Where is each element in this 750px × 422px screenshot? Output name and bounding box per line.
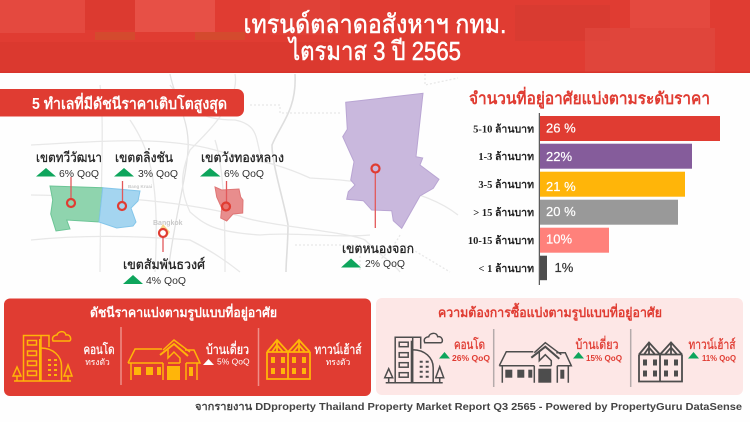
- district: Thawi Watthana: เขตทวีวัฒนา: [36, 150, 102, 165]
- district: Nong Chok: เขตหนองจอก: [342, 241, 414, 256]
- panel: price index by property type: ทาวน์เฮ้าส์: [314, 342, 362, 357]
- bar chart: housing by price range: 1-3 ล้านบาท: [478, 150, 534, 163]
- bar chart: housing by price range: [468, 86, 720, 285]
- panel: price index by property type: 5% QoQ: [217, 356, 250, 366]
- district: Thawi Watthana: [36, 150, 103, 231]
- panel: demand by property type: ความต้องการซื้อแบ่งตามรูปแบบที่อยู่อาศัย: [438, 302, 662, 321]
- heading pill: top growth locations: [0, 89, 244, 116]
- source footnote: จากรายงาน DDproperty Thailand Property Market Report Q3 2565 - Powered by PropertyGuru DataSense: [195, 401, 742, 413]
- panel: demand by property type: ทาวน์เฮ้าส์: [688, 337, 736, 352]
- bar chart: housing by price range: 5-10 ล้านบาท: [473, 122, 534, 136]
- bar chart: housing by price range: 22%: [546, 149, 572, 164]
- map label: Bang Kruai and Bangkok: Bangkok: [153, 220, 183, 227]
- panel: demand by property type: [376, 298, 743, 395]
- bar chart: housing by price range: 10-15 ล้านบาท: [468, 234, 534, 247]
- panel: demand by property type: 26% QoQ: [452, 353, 490, 363]
- district: Thawi Watthana: 6% QoQ: [59, 169, 99, 180]
- bar chart: housing by price range: < 1 ล้านบาท: [479, 262, 534, 275]
- title: ไตรมาส 3 ปี 2565: [287, 36, 461, 66]
- panel: demand by property type: 15% QoQ: [586, 353, 622, 363]
- panel: price index by property type: ทรงตัว: [326, 357, 351, 367]
- district: Taling Chan: 3% QoQ: [138, 169, 178, 180]
- header banner: [0, 0, 750, 73]
- title: [244, 9, 506, 66]
- panel: price index by property type: บ้านเดี่ยว: [206, 341, 249, 357]
- map label: Bang Kruai and Bangkok: [128, 184, 183, 227]
- map background roads: [31, 74, 458, 272]
- panel: price index by property type: คอนโด: [84, 342, 114, 357]
- district: Samphanthawong: 4% QoQ: [146, 276, 186, 287]
- district: Nong Chok: [341, 93, 439, 270]
- heading pill: top growth locations: 5 ทำเลที่มีดัชนีราคาเติบโตสูงสุด: [32, 92, 227, 115]
- panel: price index by property type: [4, 298, 371, 396]
- bar chart: housing by price range: 3-5 ล้านบาท: [478, 178, 534, 191]
- district: Taling Chan: [99, 148, 178, 228]
- bar chart: housing by price range: 1%: [554, 260, 574, 275]
- bar chart: housing by price range: 21 %: [546, 179, 576, 194]
- bar chart: housing by price range: 20 %: [546, 204, 576, 219]
- district: Nong Chok: 2% QoQ: [365, 259, 405, 270]
- bar chart: housing by price range: > 15 ล้านบาท: [473, 206, 534, 219]
- bar chart: housing by price range: 10%: [546, 232, 572, 246]
- map label: Bang Kruai and Bangkok: Bang Kruai: [128, 184, 152, 189]
- district: Taling Chan: เขตตลิ่งชัน: [115, 148, 173, 165]
- chart title: จำนวนที่อยู่อาศัยแบ่งตามระดับราคา: [469, 86, 710, 110]
- bar chart: housing by price range: 26 %: [546, 120, 576, 136]
- panel: price index by property type: ทรงตัว: [85, 357, 110, 367]
- panel: demand by property type: บ้านเดี่ยว: [576, 336, 618, 352]
- district: Wang Thonglang: เขตวังทองหลาง: [201, 150, 284, 165]
- district: Wang Thonglang: 6% QoQ: [224, 169, 264, 180]
- panel: price index by property type: ดัชนีราคาแบ่งตามรูปแบบที่อยู่อาศัย: [90, 303, 277, 321]
- district: Samphanthawong: [123, 224, 205, 287]
- district: Samphanthawong: เขตสัมพันธวงศ์: [123, 256, 205, 272]
- panel: demand by property type: 11% QoQ: [702, 353, 736, 363]
- district: Wang Thonglang: [200, 150, 284, 221]
- faint building photo: [0, 0, 715, 73]
- panel: demand by property type: คอนโด: [454, 337, 485, 352]
- title: เทรนด์ตลาดอสังหาฯ กทม.: [244, 9, 506, 39]
